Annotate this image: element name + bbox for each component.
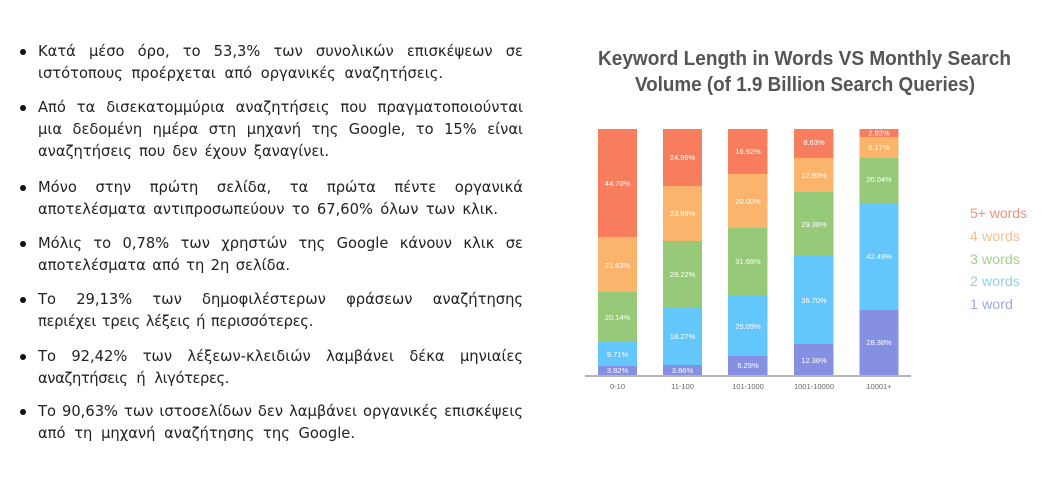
panel: bullet list of statistics — [20, 43, 523, 442]
legend: 5+ words — [970, 205, 1027, 221]
bar: 10001+: 2.92% — [868, 128, 890, 138]
x axis labels: 1001-10000 — [794, 382, 834, 391]
x axis labels: 10001+ — [866, 382, 892, 391]
bullet 2: αναζητήσεις που δεν έχουν ξαναγίνει. — [38, 143, 329, 160]
bar: 10001+: 28.38% — [866, 338, 892, 347]
legend: 1 word — [970, 296, 1013, 312]
bar: 1001-10000 — [794, 129, 834, 375]
bullet 5: περιέχει τρεις λέξεις ή περισσότερες. — [38, 313, 313, 330]
bar: 0-10: 21.63% — [605, 261, 631, 270]
bar: 11-100: 24.96% — [670, 153, 696, 162]
bar: 0-10: 3.82% — [607, 366, 628, 375]
bar: 101-1000: 16.92% — [735, 147, 761, 156]
bar: 101-1000: 25.09% — [735, 322, 761, 331]
x axis labels: 11-100 — [671, 382, 694, 391]
bar: 0-10: 9.71% — [607, 350, 628, 359]
bullet 7 — [20, 403, 523, 442]
bullet 2 — [20, 99, 523, 160]
bullet 4: αποτελέσματα από τη 2η σελίδα. — [38, 257, 290, 274]
legend: 4 words — [970, 228, 1020, 244]
bar: 0-10: 20.14% — [605, 313, 631, 322]
bar: 1001-10000: 29.38% — [801, 220, 827, 229]
bullet 1: Κατά μέσο όρο, το 53,3% των συνολικών επισκέψεων σε — [38, 43, 523, 60]
legend — [970, 205, 1027, 312]
bar: 1001-10000: 12.36% — [801, 356, 827, 365]
legend: 3 words — [970, 251, 1020, 267]
bar: 1001-10000: 12.93% — [801, 171, 827, 180]
bullet 3: Μόνο στην πρώτη σελίδα, τα πρώτα πέντε οργανικά — [38, 179, 523, 196]
bar: 0-10: 44.70% — [605, 179, 631, 188]
bar: 10001+: 20.04% — [866, 175, 892, 184]
bar: 11-100: 3.86% — [672, 366, 693, 375]
bar: 101-1000: 6.29% — [737, 361, 759, 370]
bar: 11-100: 29.22% — [670, 270, 696, 279]
bullet 3: αποτελέσματα αντιπροσωπεύουν το 67,60% όλων των κλικ. — [38, 201, 498, 218]
bar: 11-100: 18.27% — [670, 332, 696, 341]
bullet 5: Το 29,13% των δημοφιλέστερων φράσεων αναζήτησης — [38, 291, 523, 308]
legend: 2 words — [970, 273, 1020, 289]
bullet 5 — [20, 291, 523, 330]
x axis labels: 0-10 — [610, 382, 625, 391]
bullet 7: Το 90,63% των ιστοσελίδων δεν λαμβάνει οργανικές επισκέψεις — [38, 403, 523, 420]
bullet 6: αναζητήσεις ή λιγότερες. — [38, 370, 229, 387]
bullet 6 — [20, 348, 523, 387]
bullet 1: ιστότοπους προέρχεται από οργανικές αναζητήσεις. — [38, 65, 443, 82]
bar: 10001+ — [860, 128, 898, 375]
x axis labels: 101-1000 — [732, 382, 764, 391]
bullet 2: μια δεδομένη ημέρα στη μηχανή της Google, το 15% είναι — [38, 121, 523, 138]
bar: 101-1000: 31.69% — [735, 257, 761, 266]
bar: 1001-10000: 8.63% — [803, 138, 825, 147]
bar: 0-10 — [598, 129, 637, 375]
x axis labels — [610, 382, 892, 391]
bullet 7: από τη μηχανή αναζήτησης της Google. — [38, 425, 355, 442]
x axis line — [585, 375, 911, 377]
bullet 4 — [20, 235, 523, 274]
bullet 4: Μόλις το 0,78% των χρηστών της Google κάνουν κλικ σε — [38, 235, 523, 252]
chart title: Volume (of 1.9 Billion Search Queries) — [635, 74, 975, 96]
bar: 11-100 — [663, 129, 702, 375]
bullet 1 — [20, 43, 523, 82]
chart title — [598, 48, 1011, 96]
bar: 101-1000 — [728, 129, 768, 375]
bullet 3 — [20, 179, 523, 218]
chart title: Keyword Length in Words VS Monthly Search — [598, 48, 1011, 70]
bullet 6: Το 92,42% των λέξεων-κλειδιών λαμβάνει δέκα μηνιαίες — [38, 348, 523, 365]
bullet 2: Από τα δισεκατομμύρια αναζητήσεις που πραγματοποιούνται — [38, 99, 523, 116]
bar: 10001+: 6.17% — [868, 143, 890, 152]
bar: 10001+: 42.49% — [866, 252, 892, 261]
bar: 101-1000: 20.00% — [735, 197, 761, 206]
bar: 11-100: 23.69% — [670, 209, 696, 218]
bar: 1001-10000: 36.70% — [801, 296, 827, 305]
